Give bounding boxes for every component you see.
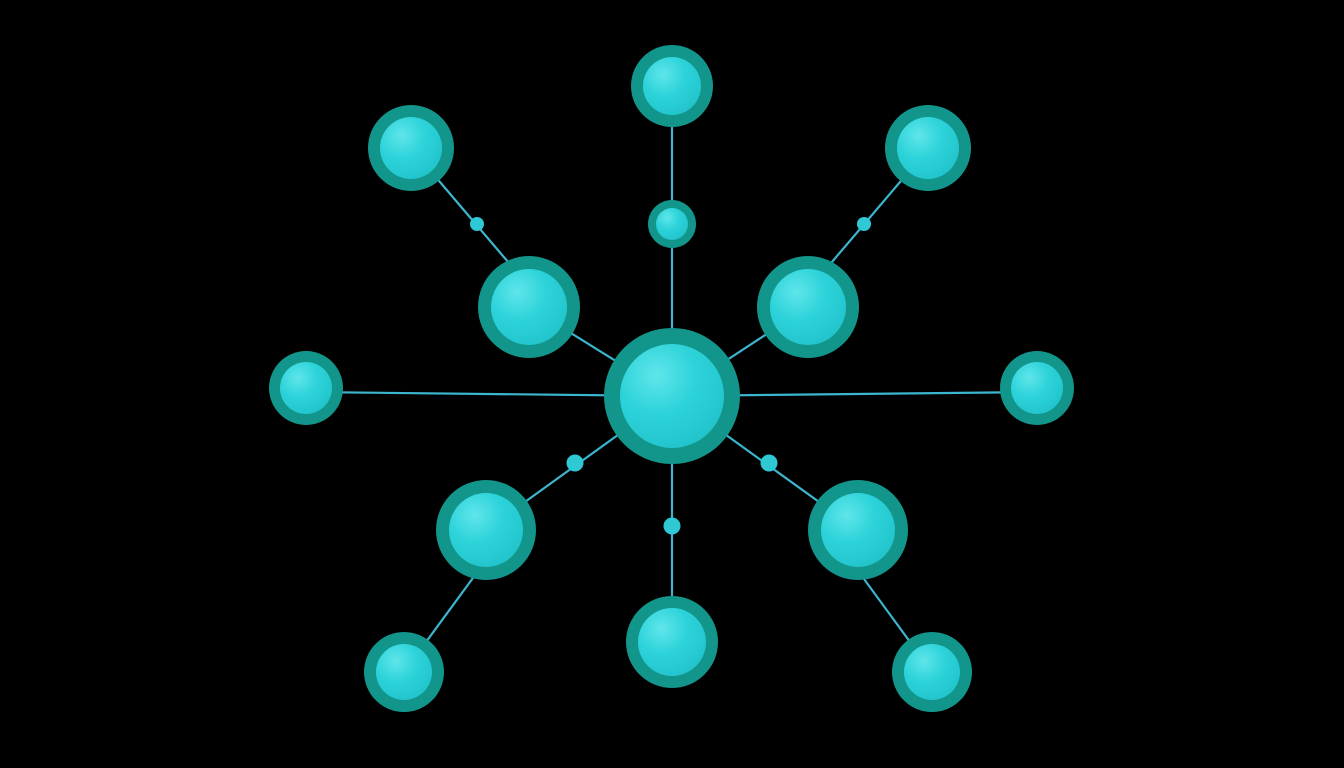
node: top small (648, 200, 696, 248)
small dots (470, 217, 871, 534)
node: bottom (626, 596, 718, 688)
node: top (631, 45, 713, 127)
node: center (604, 328, 740, 464)
node: lower-right (808, 480, 908, 580)
node: top-left (368, 105, 454, 191)
nodes (269, 45, 1074, 712)
connecting lines (306, 86, 1037, 672)
node: left (269, 351, 343, 425)
node: lower-left (436, 480, 536, 580)
node: upper-left (478, 256, 580, 358)
node: top-right (885, 105, 971, 191)
node: right (1000, 351, 1074, 425)
node: bottom-left (364, 632, 444, 712)
node: upper-right (757, 256, 859, 358)
node: bottom-right (892, 632, 972, 712)
